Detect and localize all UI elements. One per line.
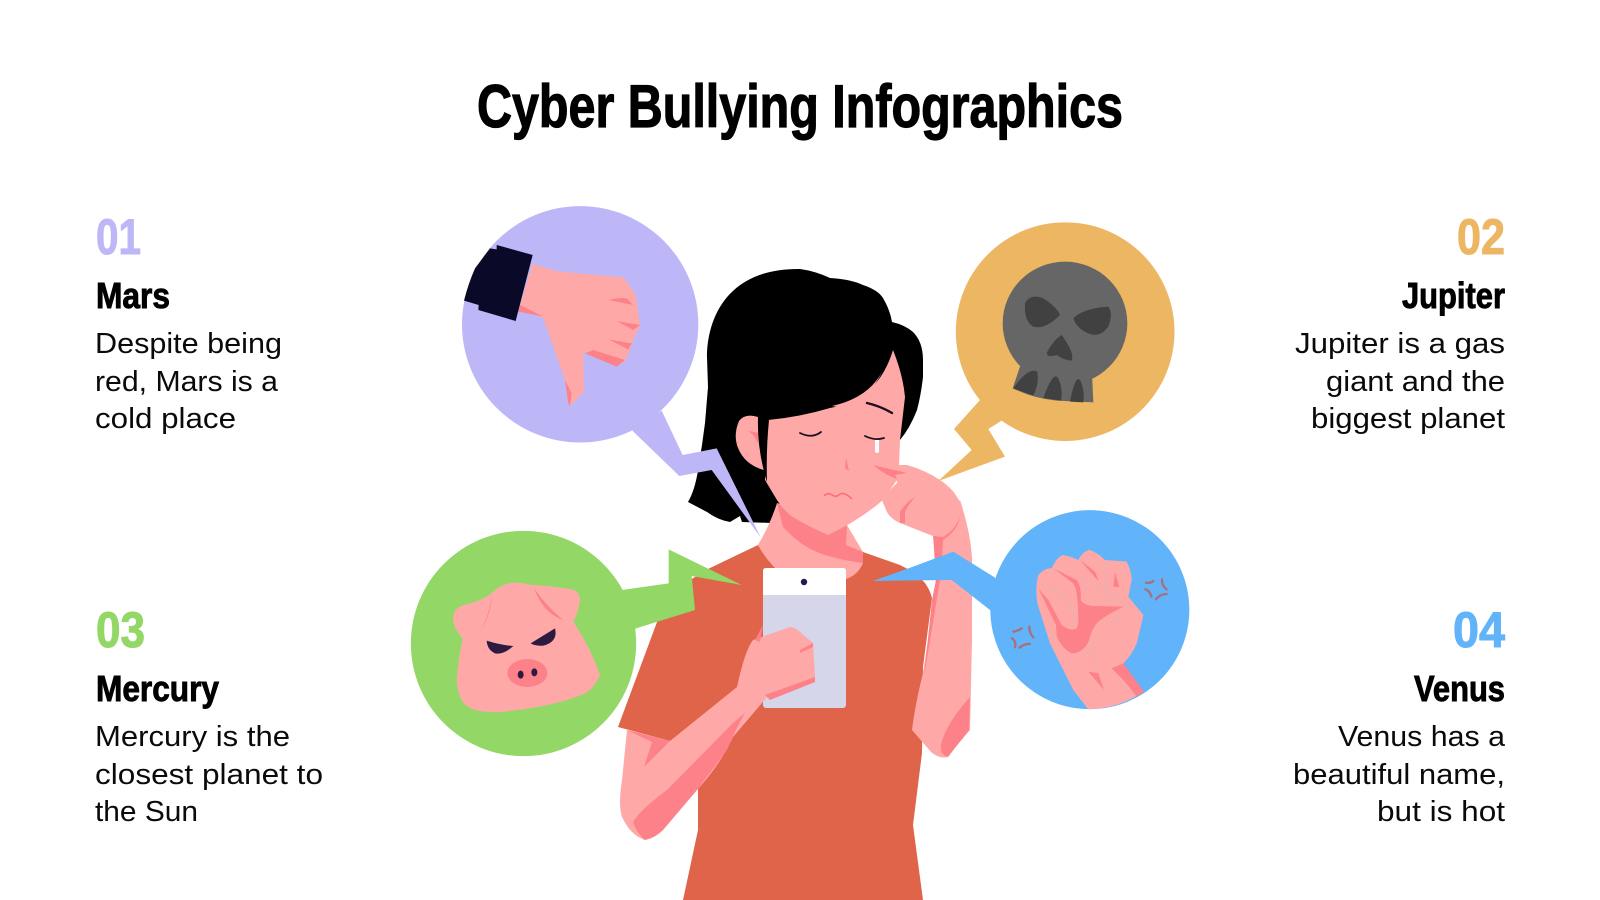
bubble bbox=[873, 510, 1189, 709]
text block: 04 Venus bbox=[1293, 602, 1505, 828]
hand at nose bbox=[882, 465, 960, 540]
mouth bbox=[824, 494, 852, 499]
number 03: 03 bbox=[96, 602, 145, 658]
description Jupiter: giant and the bbox=[1326, 366, 1505, 398]
hand shading bbox=[873, 465, 960, 557]
description Mercury: Mercury is the bbox=[95, 721, 290, 753]
heading Venus: Venus bbox=[1414, 668, 1505, 709]
heading Mars: Mars bbox=[96, 275, 170, 316]
description Venus: Venus has a bbox=[1338, 721, 1505, 753]
face bbox=[765, 350, 905, 535]
icon: pig bbox=[453, 583, 600, 712]
nose bbox=[845, 458, 849, 471]
hair lock bbox=[758, 417, 769, 482]
tear bbox=[875, 440, 879, 453]
description Mercury bbox=[95, 721, 323, 828]
right arm shadows bbox=[924, 532, 970, 757]
description Mercury: the Sun bbox=[95, 796, 198, 828]
panel: orange speech bubble with skull bbox=[938, 222, 1174, 481]
panel: green speech bubble with pig bbox=[411, 531, 742, 756]
heading Jupiter: Jupiter bbox=[1402, 275, 1505, 316]
icon: thumbs down bbox=[464, 245, 640, 406]
heading Mercury: Mercury bbox=[96, 668, 219, 709]
eyes and brow bbox=[800, 403, 892, 439]
text block: 03 Mercury bbox=[95, 602, 323, 828]
description Mars bbox=[95, 328, 282, 435]
icon: anger marks bbox=[1012, 579, 1167, 648]
description Mercury: closest planet to bbox=[95, 759, 323, 791]
bubble bbox=[938, 222, 1174, 481]
description Jupiter bbox=[1295, 328, 1505, 435]
number 02: 02 bbox=[1457, 209, 1505, 265]
neck shadow bbox=[777, 503, 863, 563]
left arm bbox=[620, 627, 815, 840]
ear bbox=[736, 416, 768, 470]
number 01: 01 bbox=[96, 209, 141, 265]
description Venus: beautiful name, bbox=[1293, 759, 1505, 791]
shirt bbox=[618, 545, 932, 900]
bubble bbox=[411, 531, 742, 756]
text block: 01 Mars bbox=[95, 209, 282, 435]
panel: purple speech bubble with thumbs down bbox=[462, 206, 761, 537]
icon: skull bbox=[1003, 262, 1127, 402]
left arm shadows bbox=[627, 625, 815, 840]
description Venus bbox=[1293, 721, 1505, 828]
hair bbox=[688, 269, 923, 523]
panel: blue speech bubble with fist bbox=[873, 510, 1189, 709]
text block: 02 Jupiter bbox=[1295, 209, 1505, 435]
description Jupiter: Jupiter is a gas bbox=[1295, 328, 1505, 360]
description Mars: red, Mars is a bbox=[95, 366, 278, 398]
fringe highlight bbox=[832, 372, 882, 407]
description Jupiter: biggest planet bbox=[1311, 403, 1505, 435]
illustration: crying person bbox=[618, 269, 972, 900]
description Venus: but is hot bbox=[1377, 796, 1505, 828]
phone bbox=[763, 568, 846, 708]
right arm bbox=[912, 500, 972, 758]
description Mars: Despite being bbox=[95, 328, 282, 360]
number 04: 04 bbox=[1453, 602, 1505, 658]
title: Cyber Bullying Infographics bbox=[477, 73, 1123, 140]
bubble bbox=[462, 206, 761, 537]
description Mars: cold place bbox=[95, 403, 236, 435]
icon: fist bbox=[1012, 550, 1167, 709]
neck bbox=[758, 503, 863, 582]
